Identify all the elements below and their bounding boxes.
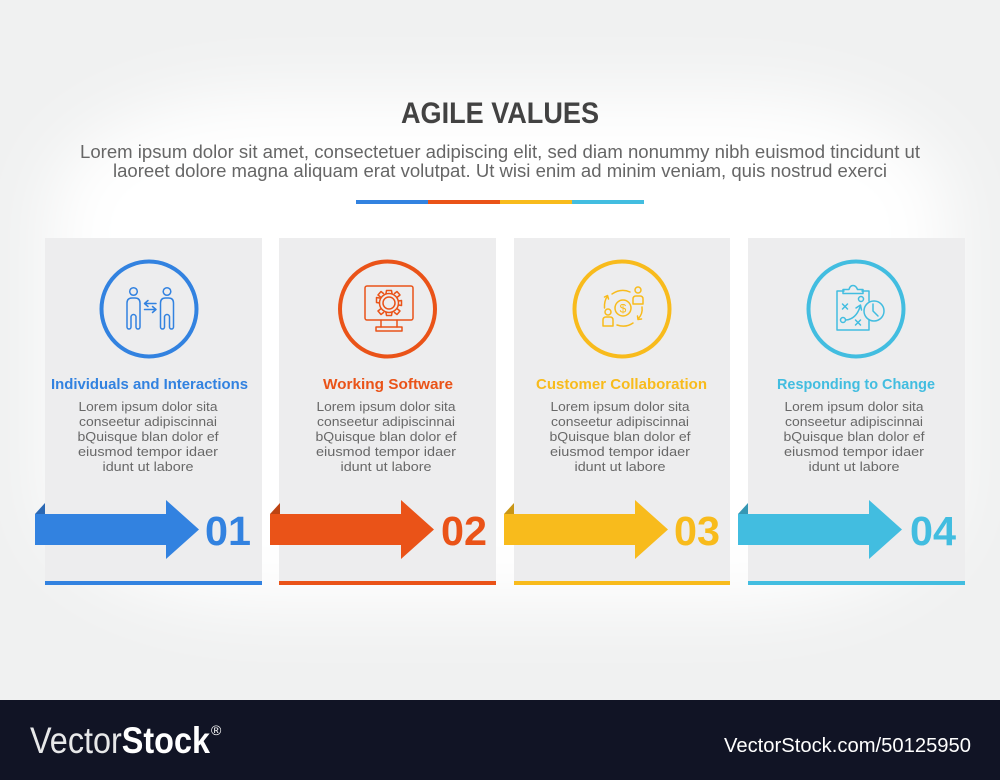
- heading: Individuals and Interactions: [51, 376, 248, 393]
- heading: Working Software: [323, 376, 453, 393]
- body text: [78, 400, 219, 474]
- footer band: [0, 700, 1000, 780]
- body text: bQuisque blan dolor ef: [316, 430, 457, 444]
- body text: conseetur adipiscinnai: [551, 415, 689, 429]
- body text: idunt ut labore: [808, 460, 900, 474]
- panel: working software: [270, 238, 496, 585]
- number: 01: [205, 508, 251, 554]
- body text: bQuisque blan dolor ef: [78, 430, 219, 444]
- body text: eiusmod tempor idaer: [550, 445, 690, 459]
- body text: eiusmod tempor idaer: [78, 445, 218, 459]
- subtitle text block: Lorem ipsum dolor sit amet, consectetuer adipiscing elit, sed diam nonummy nibh euismod tincidunt ut: [80, 142, 920, 162]
- icon: customers exchanging money: [574, 262, 670, 356]
- body text: idunt ut labore: [340, 460, 432, 474]
- arrow: [270, 500, 434, 559]
- body text: conseetur adipiscinnai: [79, 415, 217, 429]
- number: 03: [674, 508, 720, 554]
- subtitle text block: laoreet dolore magna aliquam erat volutpat. Ut wisi enim ad minim veniam, quis nostrud exerci: [113, 161, 887, 181]
- body text: conseetur adipiscinnai: [785, 415, 923, 429]
- body text: conseetur adipiscinnai: [317, 415, 455, 429]
- body text: [784, 400, 925, 474]
- number: 02: [441, 508, 487, 554]
- heading: Customer Collaboration: [536, 376, 707, 393]
- four-colour divider bar: [356, 200, 644, 204]
- panel: customer collaboration: [504, 238, 730, 585]
- body text: idunt ut labore: [574, 460, 666, 474]
- body text: eiusmod tempor idaer: [784, 445, 924, 459]
- arrow: [35, 500, 199, 559]
- icon: monitor with gear: [340, 262, 435, 356]
- body text: idunt ut labore: [102, 460, 194, 474]
- footer logo: VectorStock: [30, 720, 210, 761]
- body text: bQuisque blan dolor ef: [550, 430, 691, 444]
- icon: customers exchanging money: $: [620, 302, 627, 316]
- arrow: [504, 500, 668, 559]
- icon: two people exchanging: [102, 262, 196, 356]
- heading: Responding to Change: [777, 376, 935, 393]
- body text: [316, 400, 457, 474]
- body text: Lorem ipsum dolor sita: [78, 400, 218, 414]
- subtitle text block: [80, 142, 920, 181]
- body text: Lorem ipsum dolor sita: [784, 400, 924, 414]
- arrow: [738, 500, 902, 559]
- registered mark: ®: [211, 722, 222, 738]
- footer url: VectorStock.com/50125950: [724, 735, 971, 757]
- icon: clipboard plan with clock: [808, 262, 904, 356]
- panel: responding to change: [738, 238, 965, 585]
- body text: Lorem ipsum dolor sita: [550, 400, 690, 414]
- body text: Lorem ipsum dolor sita: [316, 400, 456, 414]
- body text: [550, 400, 691, 474]
- number: 04: [910, 508, 956, 554]
- title: AGILE VALUES: [401, 97, 599, 130]
- body text: bQuisque blan dolor ef: [784, 430, 925, 444]
- panel: individuals and interactions: [35, 238, 262, 585]
- body text: eiusmod tempor idaer: [316, 445, 456, 459]
